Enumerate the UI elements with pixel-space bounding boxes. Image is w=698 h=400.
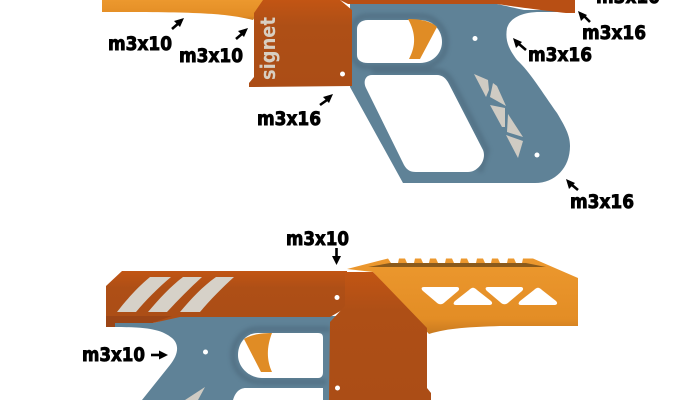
bottom red block <box>329 272 431 400</box>
bottom trigger <box>244 333 272 372</box>
bottom grip shading <box>233 329 330 382</box>
label: m3x16 rail end <box>578 11 646 44</box>
bottom view: pistol frame <box>106 258 578 400</box>
top grip triangles <box>474 74 523 158</box>
bottom orange barrel <box>347 258 578 334</box>
top grey grip <box>350 4 570 183</box>
top view: pistol frame <box>102 0 575 183</box>
label: m3x10 junction: m3x10 <box>179 45 243 67</box>
bottom white windows <box>238 333 323 378</box>
label: m3x10 top of slide <box>286 228 349 265</box>
top grip inner shading <box>353 16 487 172</box>
signet logo: signet <box>256 17 280 80</box>
label: m3x10 barrel <box>108 18 184 55</box>
top orange barrel <box>102 0 266 20</box>
top red rail <box>340 0 575 13</box>
top trigger <box>408 19 437 59</box>
bottom decor stripes <box>117 277 234 312</box>
callouts <box>82 0 660 366</box>
bottom red rail <box>106 271 347 327</box>
label: m3x16 rail end: m3x16 <box>582 22 646 44</box>
label: m3x16 grip bottom: m3x16 <box>570 191 634 213</box>
label: m3x16 block <box>257 94 333 130</box>
label: m3x10 top of slide: m3x10 <box>286 228 349 250</box>
label: m3x10 grip side: m3x10 <box>82 344 145 366</box>
top lower window <box>365 75 484 172</box>
label: m3x16 block: m3x16 <box>257 108 321 130</box>
bottom grey grip <box>112 316 340 400</box>
bottom grip triangles <box>185 387 205 400</box>
label: m3x16 grip top: m3x16 <box>528 44 592 66</box>
label: m3x16 grip bottom <box>566 179 634 213</box>
rail dark groove <box>368 263 546 267</box>
top red block <box>249 0 352 87</box>
screw holes <box>340 36 540 158</box>
bottom screw holes <box>203 295 340 390</box>
label: m3x10 junction <box>179 28 248 67</box>
label: m3x16 grip top <box>513 38 592 66</box>
label: m3x10 barrel: m3x10 <box>108 33 172 55</box>
top trigger window <box>357 20 442 63</box>
